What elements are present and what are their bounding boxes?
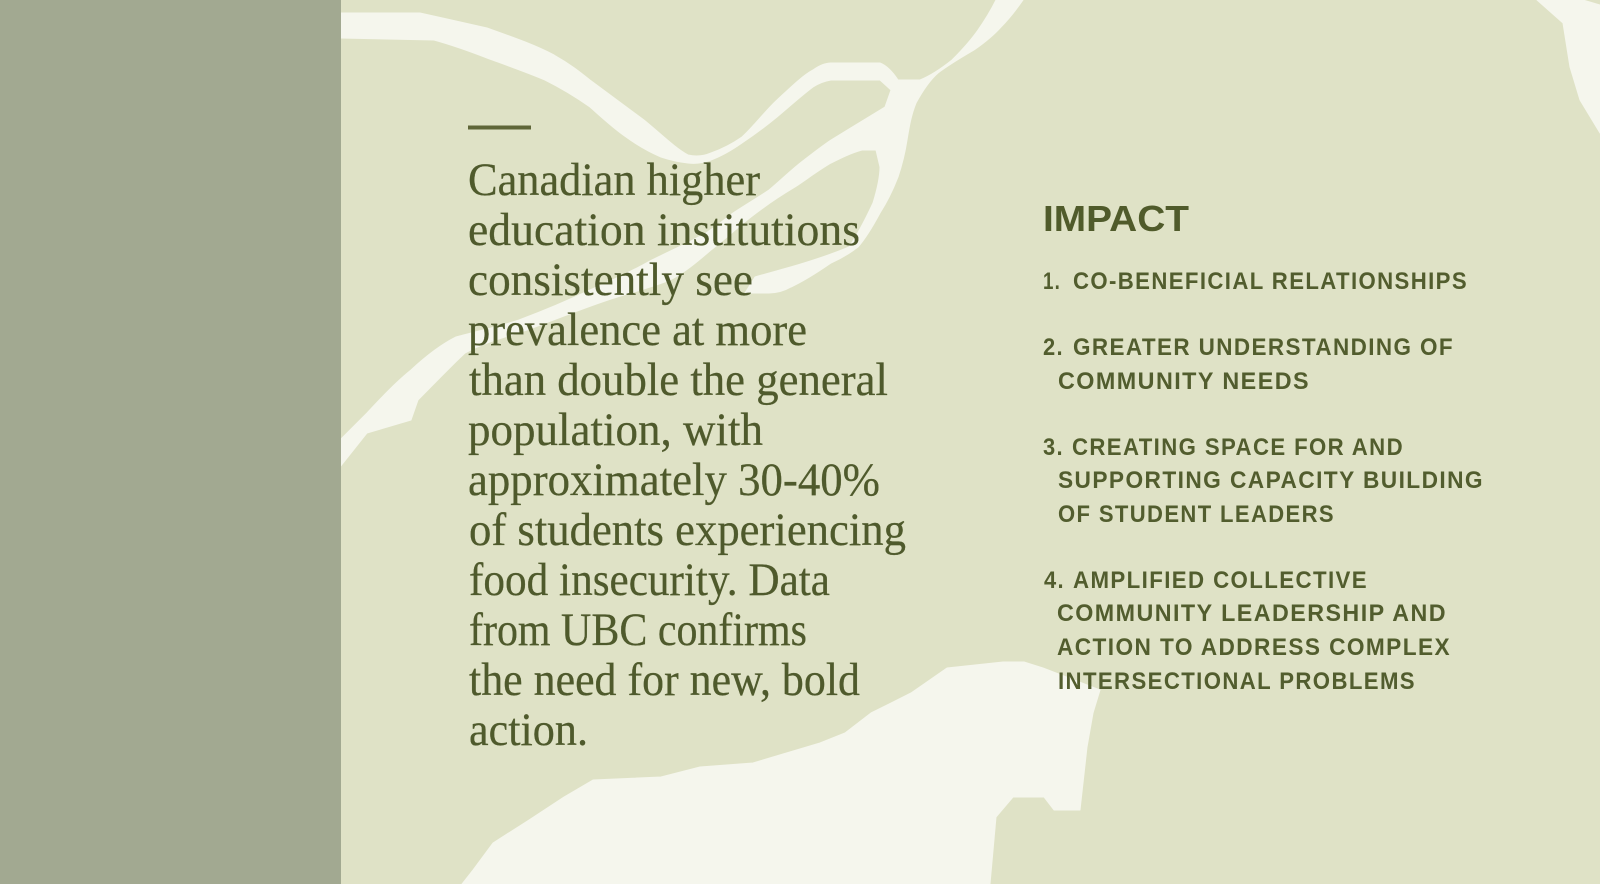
statement text block: the need for new, bold [469, 654, 860, 706]
item 1: CO-BENEFICIAL RELATIONSHIPS [1073, 268, 1468, 295]
item 4: 4. [1044, 567, 1065, 594]
accent rule above statement [468, 126, 531, 130]
item 4: INTERSECTIONAL PROBLEMS [1058, 668, 1416, 695]
item 2: 2. [1043, 334, 1064, 361]
statement text block: food insecurity. Data [469, 554, 830, 606]
item 3: CREATING SPACE FOR AND [1072, 434, 1404, 461]
item 2 [1043, 334, 1454, 395]
statement text block [468, 154, 906, 756]
statement text block: action. [469, 704, 588, 756]
left sidebar panel [0, 0, 341, 884]
impact list [1043, 268, 1484, 695]
statement text block: population, with [468, 404, 763, 456]
item 4: AMPLIFIED COLLECTIVE [1073, 567, 1368, 594]
item 2: GREATER UNDERSTANDING OF [1073, 334, 1454, 361]
item 4: ACTION TO ADDRESS COMPLEX [1057, 634, 1451, 661]
item 1: 1. [1043, 268, 1061, 295]
statement text block: approximately 30-40% [468, 454, 880, 506]
statement text block: than double the general [469, 354, 888, 406]
map rivers and water shapes [340, 0, 1600, 884]
statement text block: of students experiencing [469, 504, 906, 556]
statement text block: prevalence at more [468, 304, 807, 356]
item 3: OF STUDENT LEADERS [1058, 501, 1335, 528]
item 4 [1044, 567, 1451, 695]
statement text block: from UBC confirms [469, 604, 807, 656]
item 3: 3. [1043, 434, 1064, 461]
item 3: SUPPORTING CAPACITY BUILDING [1058, 467, 1484, 494]
item 4: COMMUNITY LEADERSHIP AND [1057, 600, 1447, 627]
statement text block: education institutions [468, 204, 860, 256]
statement text block: consistently see [468, 254, 753, 306]
item 2: COMMUNITY NEEDS [1058, 368, 1310, 395]
statement text block: Canadian higher [468, 154, 760, 206]
impact heading: IMPACT [1043, 198, 1189, 239]
item 3 [1043, 434, 1484, 528]
